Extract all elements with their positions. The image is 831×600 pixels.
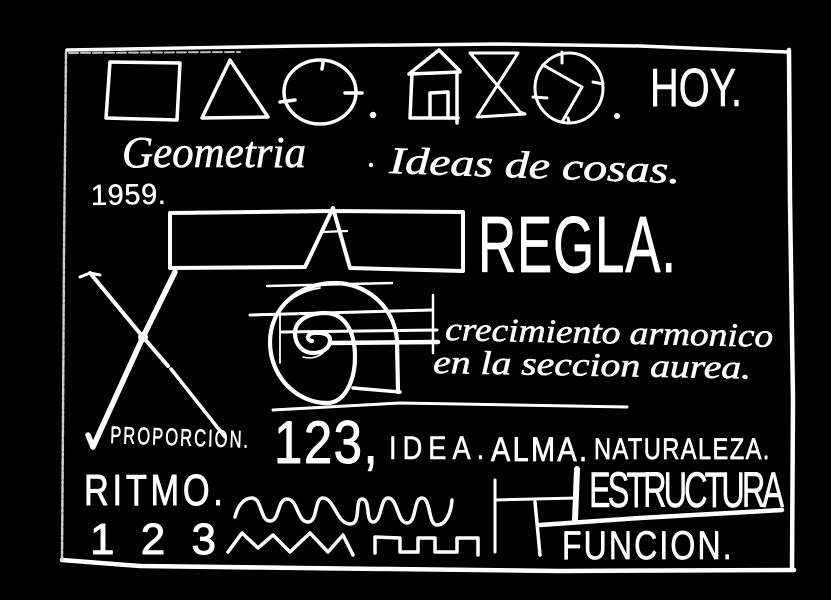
heading: REGLA: REGLA. — [478, 201, 676, 290]
chart: sine wave rhythm — [235, 498, 452, 525]
icon: house — [409, 50, 460, 123]
chart: square wave rhythm — [375, 537, 478, 555]
label: IDEA: IDEA. — [389, 431, 484, 467]
icon: clock circle — [533, 52, 618, 123]
label: ALMA: ALMA. — [491, 430, 587, 469]
heading: HOY: HOY. — [650, 58, 742, 118]
label: Ideas de cosas: Ideas de cosas. — [387, 140, 681, 192]
label: FUNCION: FUNCION. — [562, 523, 732, 568]
label: PROPORCION: PROPORCION. — [110, 422, 249, 454]
text: en la seccion aurea: en la seccion aurea. — [433, 345, 751, 387]
dot before Ideas — [369, 163, 373, 167]
icon: hourglass — [470, 53, 525, 117]
divider line under spiral — [273, 403, 627, 410]
hand-drawn frame — [62, 44, 794, 571]
icon: square — [106, 62, 180, 120]
diagram: proportion X — [80, 272, 225, 447]
label: Geometria: Geometria — [122, 128, 306, 177]
label: 1959: 1959. — [91, 179, 166, 212]
label: ESTRUCTURA: ESTRUCTURA — [589, 462, 785, 518]
icon: triangle — [202, 60, 268, 118]
label: NATURALEZA: NATURALEZA. — [594, 432, 769, 466]
numbers: 123: 123, — [274, 409, 378, 476]
numbers: 1 2 3: 1 2 3 — [90, 515, 216, 564]
label: RITMO: RITMO. — [84, 466, 223, 515]
diagram: golden spiral — [250, 283, 438, 403]
diagram: rule rectangle with A — [170, 208, 463, 271]
icon: circle with ticks — [280, 60, 374, 124]
text: crecimiento armonico: crecimiento armonico — [445, 312, 774, 355]
diagram: structure lines — [495, 469, 782, 555]
chart: zigzag rhythm — [228, 533, 353, 555]
